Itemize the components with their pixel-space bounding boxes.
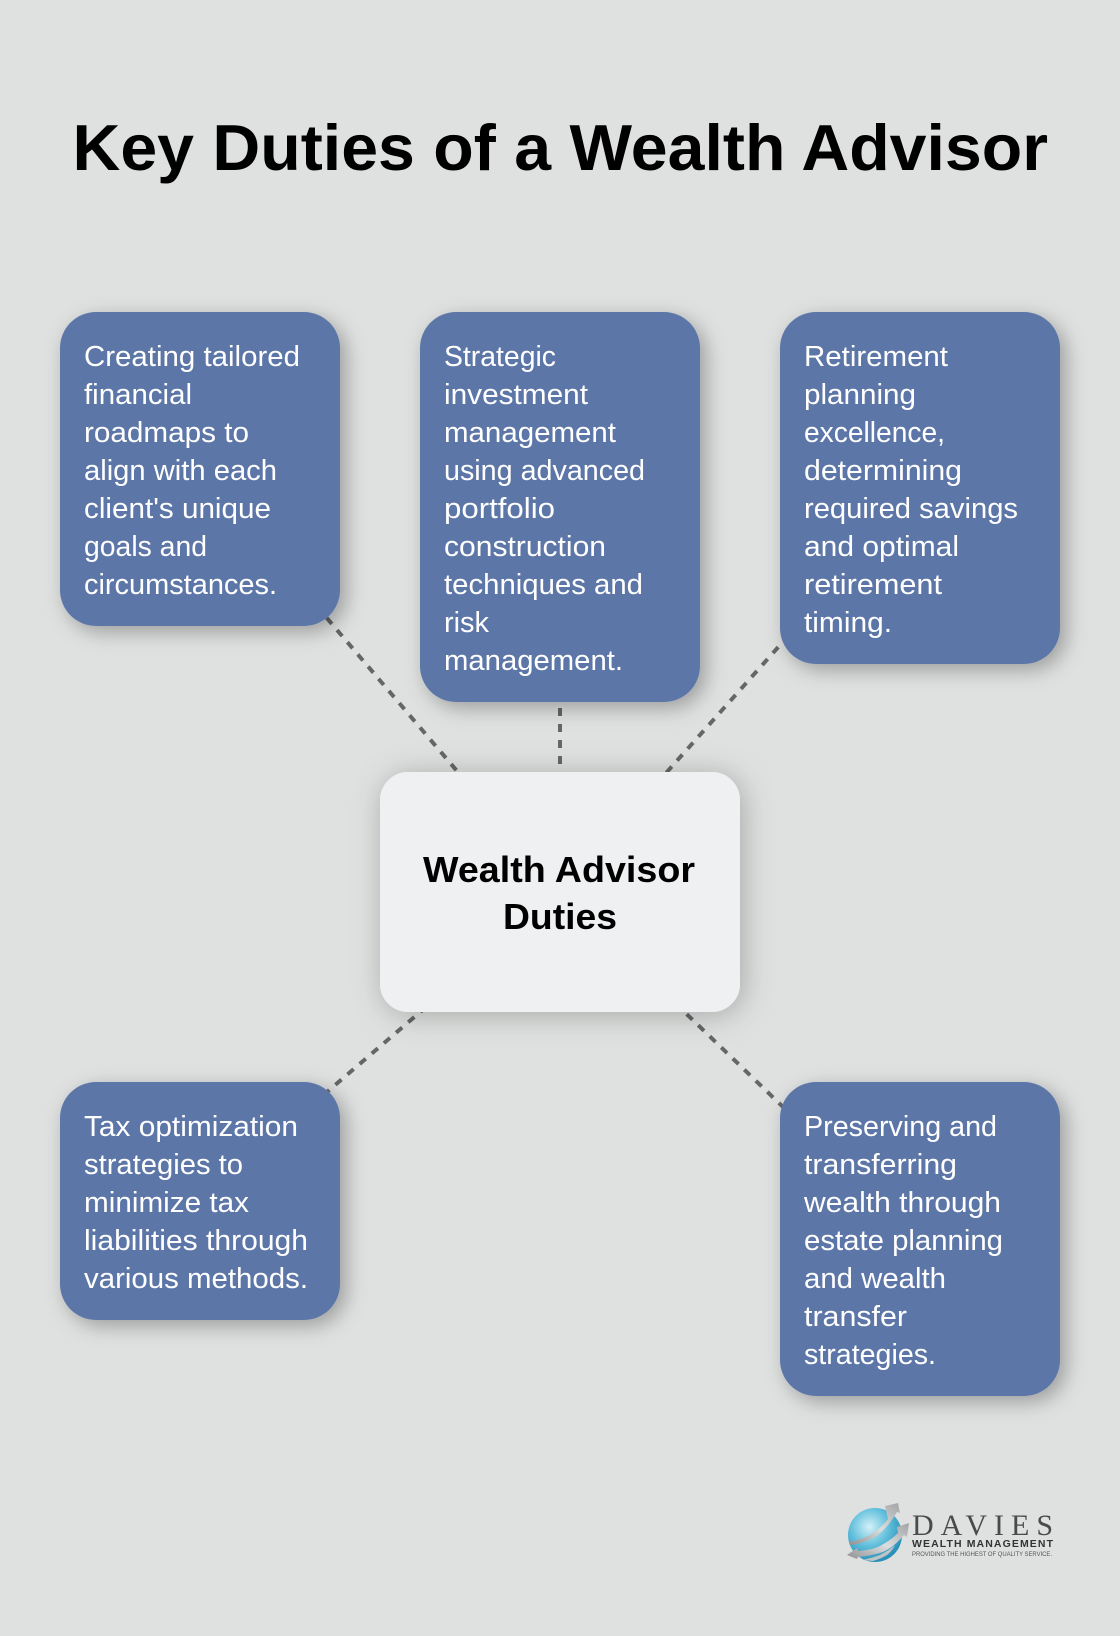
panel: retirement planning	[780, 312, 1060, 664]
panel: tax optimization: strategies to	[84, 1149, 243, 1181]
panel: estate planning and wealth transfer: strategies.	[804, 1339, 936, 1371]
icon: globe with silver arrows	[847, 1503, 909, 1562]
panel: tailored financial roadmaps: client's unique	[84, 493, 271, 525]
panel: strategic investment management: management.	[444, 645, 623, 677]
logo wordmark: DAVIES	[912, 1509, 1053, 1542]
panel: strategic investment management: investment	[444, 379, 588, 411]
panel: retirement planning: excellence,	[804, 417, 945, 449]
panel: tailored financial roadmaps: Creating tailored	[84, 341, 300, 373]
panel: retirement planning: planning	[804, 379, 916, 411]
panel: tailored financial roadmaps: financial	[84, 379, 192, 411]
panel: tailored financial roadmaps: circumstances.	[84, 569, 277, 601]
panel: central hub: Wealth Advisor	[423, 849, 695, 890]
panel: estate planning and wealth transfer: wealth through	[803, 1187, 1001, 1219]
panel: estate planning and wealth transfer: transferring	[804, 1149, 957, 1181]
panel: tax optimization	[60, 1082, 340, 1320]
panel: tailored financial roadmaps: goals and	[84, 531, 207, 563]
panel: tailored financial roadmaps: align with each	[84, 455, 277, 487]
panel: retirement planning: and optimal	[804, 531, 959, 563]
panel: estate planning and wealth transfer: and wealth	[804, 1263, 946, 1295]
panel: tailored financial roadmaps: roadmaps to	[84, 417, 249, 449]
panel: strategic investment management: management	[444, 417, 616, 449]
panel: estate planning and wealth transfer: transfer	[804, 1301, 908, 1333]
panel: strategic investment management: risk	[444, 607, 490, 639]
logo tagline: PROVIDING THE HIGHEST OF QUALITY SERVICE.	[912, 1551, 1052, 1558]
panel: retirement planning: retirement	[804, 569, 942, 601]
panel: central hub: Duties	[503, 896, 617, 937]
panel: retirement planning: Retirement	[804, 341, 948, 373]
panel: central hub	[380, 772, 740, 1012]
panel: retirement planning: required savings	[804, 493, 1018, 525]
panel: strategic investment management: Strategic	[444, 341, 556, 373]
panel: strategic investment management: techniques and	[444, 569, 643, 601]
dashed connectors	[200, 469, 920, 1239]
logo: Davies Wealth Management	[847, 1503, 1054, 1562]
panel: estate planning and wealth transfer: estate planning	[804, 1225, 1003, 1257]
panel: strategic investment management: using advanced	[444, 455, 645, 487]
panel: estate planning and wealth transfer: Preserving and	[804, 1111, 997, 1143]
panel: estate planning and wealth transfer	[780, 1082, 1060, 1396]
panel: strategic investment management: construction	[444, 531, 606, 563]
panel: strategic investment management: portfolio	[444, 493, 555, 525]
panel: tailored financial roadmaps	[60, 312, 340, 626]
logo subtitle: WEALTH MANAGEMENT	[912, 1538, 1054, 1550]
title: Key Duties of a Wealth Advisor	[72, 111, 1048, 184]
panel: retirement planning: determining	[804, 455, 962, 487]
panel: tax optimization: Tax optimization	[84, 1111, 298, 1143]
panel: tax optimization: liabilities through	[84, 1225, 308, 1257]
panel: tax optimization: various methods.	[84, 1263, 308, 1295]
panel: tax optimization: minimize tax	[84, 1187, 249, 1219]
panel: retirement planning: timing.	[804, 607, 892, 639]
panel: strategic investment management	[420, 312, 700, 702]
